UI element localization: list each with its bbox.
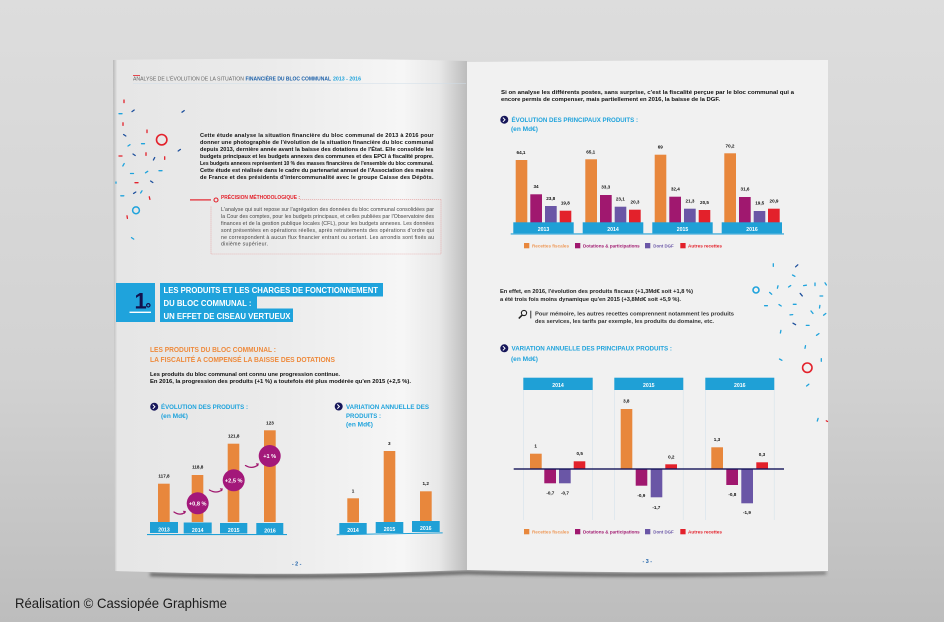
bar chart: évolution des produits: 123 — [266, 420, 274, 425]
legend: top chart: Autres recettes — [688, 244, 722, 250]
bar chart: évolution des principaux produits: 2015 — [677, 227, 688, 233]
heading: variation annuelle des principaux produits: VARIATION ANNUELLE DES PRINCIPAUX PRODUITS : — [512, 346, 672, 352]
bar chart: variation annuelle des principaux produits: 2016 — [734, 383, 746, 389]
page sheet: right — [467, 60, 828, 572]
callout: précision méthodologique: ne correspondent à aucun flux financier entrant ou sortant. Les arrondis sont fixés au — [221, 235, 434, 241]
bar chart: variation annuelle des principaux produits: 0,2 — [668, 455, 675, 460]
bar chart: variation annuelle des principaux produits: 0,3 — [759, 452, 766, 457]
credit caption: Réalisation © Cassiopée Graphisme — [15, 595, 227, 611]
confetti: right page — [765, 264, 828, 421]
page sheet: left — [113, 59, 467, 574]
intro text: de France et des présidents d'intercommunalité avec le groupe Caisse des Dépôts. — [200, 175, 434, 181]
bar chart: évolution des principaux produits: 34 — [533, 184, 539, 189]
bar chart: variation annuelle des produits: 2014 — [347, 528, 359, 534]
intro text — [501, 90, 795, 103]
bar chart: évolution des principaux produits: 2013 — [538, 227, 549, 233]
bar chart: variation annuelle des principaux produits: -1,9 — [743, 510, 751, 515]
intro text: budgets principaux et les budgets annexes des communes et des EPCI à fiscalité propre. — [200, 154, 434, 160]
lead text — [150, 372, 411, 385]
bar chart: évolution des principaux produits: 64,1 — [517, 150, 526, 155]
heading: évolution des produits: (en Md€) — [161, 413, 188, 420]
orange heading: LA FISCALITÉ A COMPENSÉ LA BAISSE DES DOTATIONS — [150, 355, 335, 364]
arrows and growth badges: +0,8 % — [189, 501, 207, 507]
page number: - 3 - — [643, 559, 652, 565]
page shadow — [150, 571, 826, 578]
legend: bottom chart — [524, 529, 722, 536]
callout: précision méthodologique — [190, 193, 441, 254]
bar chart: variation annuelle des principaux produits — [514, 378, 784, 520]
heading: variation annuelle des principaux produits — [500, 344, 672, 363]
section title banner — [160, 283, 383, 322]
bar chart: évolution des principaux produits: 20,5 — [700, 200, 709, 205]
bar chart: évolution des principaux produits: 65,1 — [586, 149, 596, 154]
legend: bottom chart: Dont DGF — [653, 530, 674, 536]
bar chart: évolution des produits: 118,8 — [192, 464, 204, 469]
intro text: depuis 2013, dernière année avant la baisse des dotations de l'État. Elle consolide les — [200, 145, 434, 153]
section number badge: 1 — [134, 288, 147, 313]
note with magnifier icon: des services, les tarifs par exemple, les produits du domaine, etc. — [535, 319, 714, 325]
note with magnifier icon — [519, 310, 734, 325]
section title banner: UN EFFET DE CISEAU VERTUEUX — [164, 312, 291, 321]
bar chart: variation annuelle des principaux produits: 3,8 — [623, 399, 630, 404]
bar chart: évolution des principaux produits: 21,3 — [686, 198, 695, 203]
bar chart: évolution des principaux produits: 2016 — [746, 227, 758, 233]
lead text: En 2016, la progression des produits (+1 %) a toutefois été plus modérée qu'en 2015 (+2,5 %). — [150, 379, 411, 385]
bar chart: évolution des principaux produits: 23,1 — [616, 197, 625, 202]
bar chart: évolution des principaux produits: 32,4 — [671, 186, 680, 191]
bar chart: évolution des principaux produits — [511, 143, 784, 234]
running header: 2013 - 2016 — [333, 76, 361, 82]
legend: top chart — [524, 243, 722, 250]
bar chart: évolution des principaux produits: 2014 — [607, 227, 619, 233]
heading: variation annuelle des principaux produits: (en Md€) — [511, 356, 538, 363]
section number badge — [116, 283, 155, 322]
bar chart: évolution des produits: 2013 — [158, 528, 170, 534]
bar chart: variation annuelle des principaux produits: -0,7 — [561, 491, 569, 496]
orange heading: LES PRODUITS DU BLOC COMMUNAL : — [150, 347, 276, 354]
icon: blue ring — [753, 287, 759, 293]
legend: bottom chart: Dotations & participations — [583, 530, 640, 536]
callout: précision méthodologique: dixième supérieur. — [221, 242, 268, 248]
heading: variation annuelle des produits: PRODUITS : — [346, 413, 381, 420]
arrows and growth badges — [174, 445, 281, 514]
bar chart: variation annuelle des principaux produits: -0,9 — [637, 493, 646, 498]
bar chart: évolution des principaux produits: 19,5 — [755, 201, 765, 206]
arrows and growth badges: +1 % — [263, 454, 276, 460]
callout: précision méthodologique: la Cour des comptes, pour les budgets principaux, et celles publiées par l'Observatoire des — [221, 214, 434, 220]
bar chart: variation annuelle des produits: 2016 — [420, 526, 432, 532]
bar chart: évolution des principaux produits: 19,8 — [561, 200, 570, 205]
bar chart: variation annuelle des principaux produits: -0,8 — [728, 492, 737, 497]
callout: précision méthodologique: PRÉCISION MÉTHODOLOGIQUE : — [221, 193, 300, 201]
bar chart: évolution des principaux produits: 31,6 — [741, 187, 750, 192]
bar chart: variation annuelle des produits: 2015 — [384, 527, 395, 533]
legend: bottom chart: Autres recettes — [688, 530, 722, 536]
icon: red ring — [803, 363, 812, 372]
bar chart: évolution des principaux produits: 69 — [658, 145, 663, 150]
bar chart: évolution des produits — [147, 420, 287, 535]
intro text: Cette étude est réalisée dans le cadre du partenariat annuel de l'Association des maires — [200, 168, 434, 174]
legend: top chart: Recettes fiscales — [532, 244, 569, 250]
intro text: Les budgets annexes représentent 10 % des masses financières de l'ensemble du bloc communal. — [200, 161, 434, 167]
intro text: donner une photographie de l'évolution de la situation financière du bloc communal — [200, 140, 434, 146]
bar chart: évolution des produits: 2014 — [192, 528, 204, 534]
text: fiscal products — [500, 289, 693, 303]
bar chart: variation annuelle des principaux produits: -1,7 — [652, 505, 661, 510]
bar chart: variation annuelle des produits: 1 — [352, 488, 355, 493]
heading: variation annuelle des produits: (en Md€) — [346, 422, 373, 428]
bar chart: évolution des principaux produits: 20,9 — [770, 199, 779, 204]
heading: évolution des produits: ÉVOLUTION DES PRODUITS : — [161, 402, 248, 411]
bar chart: évolution des produits: 117,8 — [158, 474, 170, 479]
bar chart: évolution des principaux produits: 33,3 — [601, 185, 611, 190]
legend: top chart: Dont DGF — [653, 244, 674, 250]
bar chart: variation annuelle des produits — [337, 441, 443, 535]
running header: ANALYSE DE L'ÉVOLUTION DE LA SITUATION — [133, 76, 244, 82]
left page — [113, 59, 467, 574]
legend: bottom chart: Recettes fiscales — [532, 530, 569, 536]
running header — [133, 74, 466, 84]
bar chart: variation annuelle des principaux produits: 2014 — [552, 383, 564, 389]
callout: précision méthodologique: sont présentées en opérations réelles, après retraitements des opérations d'ordre qui — [221, 228, 434, 234]
right page — [467, 60, 828, 572]
icon: red ring — [156, 134, 167, 145]
intro text — [200, 133, 434, 181]
bar chart: variation annuelle des principaux produits: 2015 — [643, 383, 655, 389]
legend: top chart: Dotations & participations — [583, 244, 640, 250]
running header: FINANCIÈRE DU BLOC COMMUNAL — [246, 74, 332, 82]
intro text: encore permis de compenser, mais partiellement en 2016, la baisse de la DGF. — [501, 97, 720, 103]
heading: évolution des principaux produits: (en Md€) — [511, 126, 538, 133]
section title banner: DU BLOC COMMUNAL : — [164, 299, 252, 308]
bar chart: évolution des principaux produits: 20,3 — [631, 200, 640, 205]
text: fiscal products: En effet, en 2016, l'évolution des produits fiscaux (+1,3Md€ soit +1,8 %) — [500, 289, 693, 295]
icon: blue ring — [133, 207, 139, 214]
heading: variation annuelle des produits: VARIATION ANNUELLE DES — [346, 404, 429, 411]
section title banner: LES PRODUITS ET LES CHARGES DE FONCTIONNEMENT — [164, 286, 378, 295]
bar chart: évolution des produits: 2016 — [264, 528, 276, 534]
bar chart: variation annuelle des principaux produits: -0,7 — [546, 491, 555, 496]
bar chart: variation annuelle des principaux produits: 1 — [534, 443, 537, 448]
bar chart: variation annuelle des produits: 1,2 — [423, 481, 429, 486]
note with magnifier icon: Pour mémoire, les autres recettes comprennent notamment les produits — [535, 312, 734, 318]
orange heading — [150, 347, 335, 364]
bar chart: évolution des principaux produits: 70,2 — [726, 143, 735, 148]
callout: précision méthodologique: finances et de la gestion publique locales (CFL), pour les budgets annexes. Les données — [221, 221, 434, 227]
intro text: Cette étude analyse la situation financière du bloc communal de 2013 à 2016 pour — [200, 133, 434, 139]
heading: évolution des principaux produits: ÉVOLUTION DES PRINCIPAUX PRODUITS : — [512, 115, 638, 124]
arrows and growth badges: +2,5 % — [225, 478, 243, 484]
bar chart: évolution des produits: 2015 — [228, 528, 240, 534]
heading: évolution des produits — [150, 402, 248, 420]
intro text: Si on analyse les différents postes, sans surprise, c'est la fiscalité perçue par le bloc communal qui a — [501, 90, 795, 96]
confetti: left page — [116, 100, 184, 239]
heading: variation annuelle des produits — [335, 402, 429, 428]
lead text: Les produits du bloc communal ont connu une progression continue. — [150, 372, 340, 378]
heading: évolution des principaux produits — [500, 115, 638, 133]
bar chart: évolution des principaux produits: 23,8 — [546, 196, 556, 201]
callout: précision méthodologique: L'analyse qui suit repose sur l'agrégation des données du bloc communal consolidées par — [221, 207, 434, 213]
bar chart: variation annuelle des principaux produits: 1,3 — [714, 437, 721, 442]
bar chart: évolution des produits: 121,8 — [228, 433, 240, 438]
bar chart: variation annuelle des principaux produits: 0,5 — [577, 451, 583, 456]
text: fiscal products: a été trois fois moins dynamique qu'en 2015 (+3,8Md€ soit +5,9 %). — [500, 297, 681, 303]
page number: - 2 - — [292, 562, 302, 568]
bar chart: variation annuelle des produits: 3 — [388, 441, 391, 446]
